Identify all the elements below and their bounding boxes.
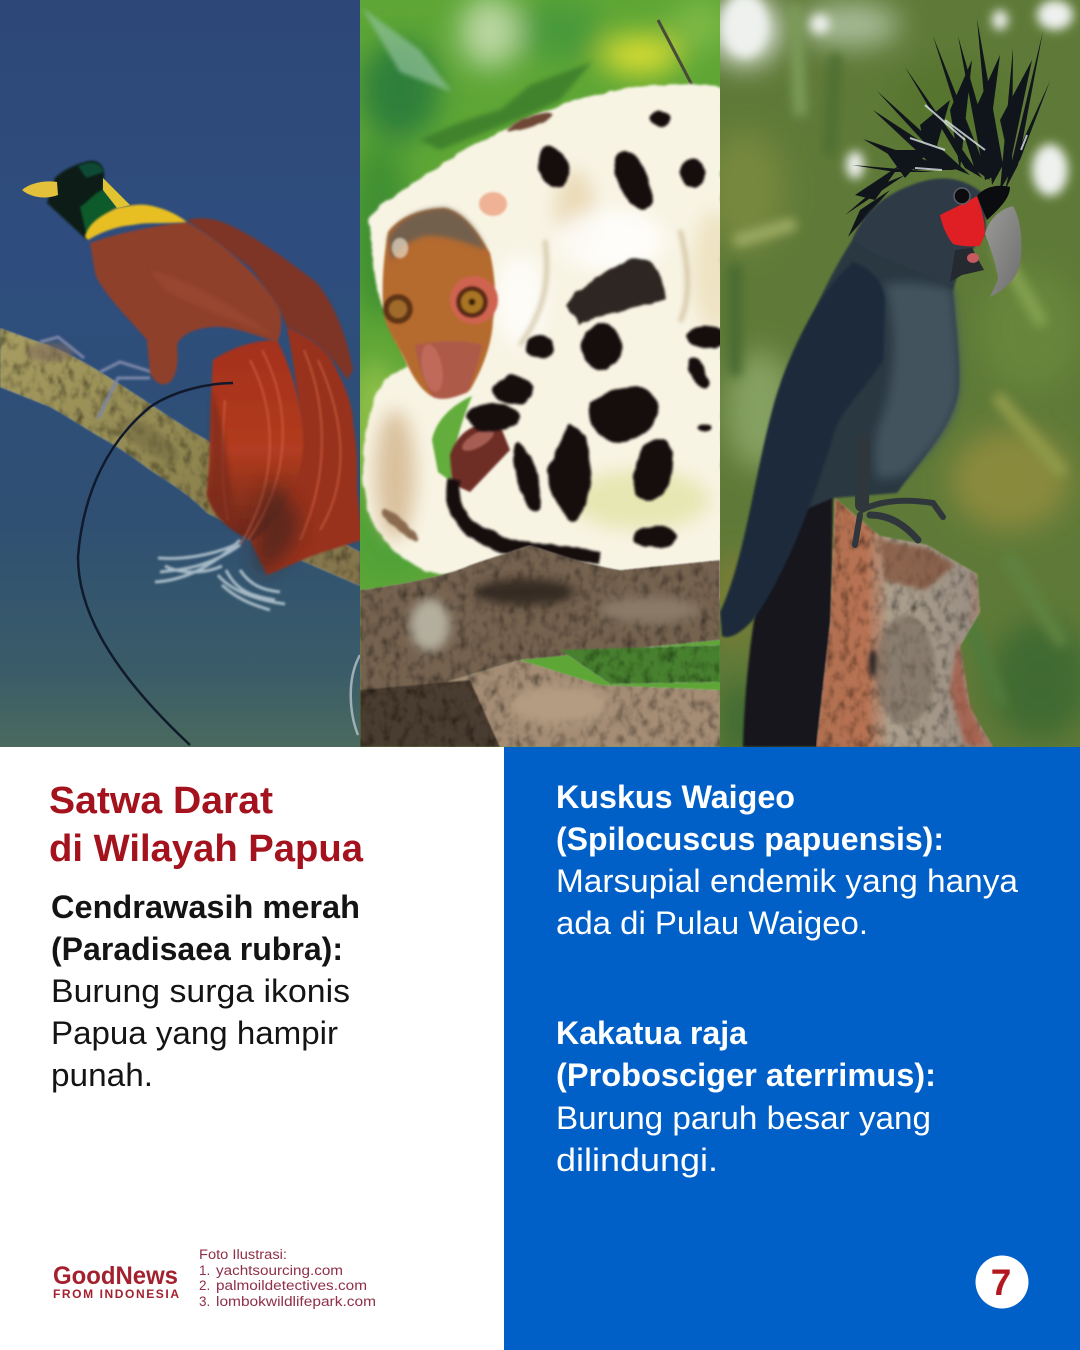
photo: red bird of paradise [0, 0, 362, 747]
heading [49, 780, 364, 870]
cockatoo cheek [940, 196, 985, 246]
foliage background [705, 0, 1080, 760]
photo: Waigeo cuscus [350, 0, 737, 747]
cuscus face [383, 192, 507, 399]
cockatoo beak [985, 206, 1022, 297]
text block: photo credits: 1. [199, 1263, 210, 1278]
cockatoo eye [954, 188, 970, 204]
bird feet [40, 337, 152, 418]
crest highlights [910, 105, 1027, 170]
text block: kuskus waigeo: Marsupial endemik yang hanya [556, 863, 1018, 899]
text block: cendrawasih merah: Papua yang hampir [51, 1015, 338, 1051]
bird back wing [187, 218, 353, 380]
text block: kakatua raja [556, 1015, 936, 1178]
text block: photo credits [199, 1247, 376, 1309]
text block: photo credits: 3. [199, 1294, 210, 1309]
bird long plume [207, 340, 303, 540]
heading: Satwa Darat [49, 780, 273, 822]
text block: kakatua raja: (Probosciger aterrimus): [556, 1057, 936, 1093]
text block: cendrawasih merah: punah. [51, 1057, 153, 1093]
text block: cendrawasih merah: Burung surga ikonis [51, 973, 350, 1009]
cockatoo chest [875, 283, 959, 478]
text block: photo credits: 2. [199, 1278, 210, 1293]
text block: kuskus waigeo: Kuskus Waigeo [556, 779, 795, 815]
text block: kakatua raja: Kakatua raja [556, 1015, 747, 1051]
cockatoo body [808, 216, 986, 508]
bird thin tail wire [78, 383, 233, 745]
text block: kakatua raja: Burung paruh besar yang [556, 1100, 931, 1136]
photo: palm cockatoo [705, 0, 1080, 760]
body creases [520, 230, 688, 345]
cuscus body [363, 84, 722, 600]
blurred leaves [735, 10, 1060, 700]
cuscus hand [450, 424, 510, 492]
black patch above beak [977, 186, 1010, 220]
tree branches [360, 545, 720, 747]
fur shading [375, 170, 737, 540]
bird body [90, 222, 281, 384]
text block: cendrawasih merah [51, 889, 360, 1093]
plume streaks [222, 350, 340, 545]
text block: kuskus waigeo: (Spilocuscus papuensis): [556, 821, 944, 857]
text block: kakatua raja: dilindungi. [556, 1142, 718, 1178]
logo: GoodNews from Indonesia: FROM INDONESIA [53, 1287, 179, 1301]
text block: photo credits: yachtsourcing.com [216, 1263, 343, 1278]
text block: kuskus waigeo [556, 779, 1018, 941]
cuscus spots [378, 109, 727, 564]
bird head [47, 161, 104, 240]
heading: di Wilayah Papua [49, 828, 364, 870]
logo: GoodNews from Indonesia: GoodNews [53, 1262, 178, 1290]
tree stump [816, 498, 993, 747]
text block: cendrawasih merah: Cendrawasih merah [51, 889, 360, 925]
foliage background [350, 0, 730, 580]
cockatoo leg and claws [855, 440, 943, 545]
page number badge: 7 [991, 1262, 1011, 1303]
green gap under the chin [432, 396, 472, 482]
branch [0, 328, 360, 586]
cockatoo crest [845, 19, 1050, 237]
text block: kuskus waigeo: ada di Pulau Waigeo. [556, 905, 868, 941]
cockatoo tail [743, 478, 833, 747]
page number badge [976, 1256, 1028, 1308]
text block: cendrawasih merah: (Paradisaea rubra): [51, 931, 343, 967]
cockatoo wing [720, 262, 885, 637]
bird long plume right [250, 327, 362, 575]
panel: blue [504, 747, 1080, 1350]
bird beak [22, 181, 58, 197]
bird yellow collar [85, 205, 187, 240]
text block: photo credits: lombokwildlifepark.com [216, 1294, 376, 1309]
bird white feathers [155, 540, 285, 610]
text block: photo credits: Foto Ilustrasi: [199, 1247, 287, 1262]
cockatoo head [853, 178, 985, 290]
text block: photo credits: palmoildetectives.com [216, 1278, 367, 1293]
cockatoo lower beak [950, 248, 984, 282]
